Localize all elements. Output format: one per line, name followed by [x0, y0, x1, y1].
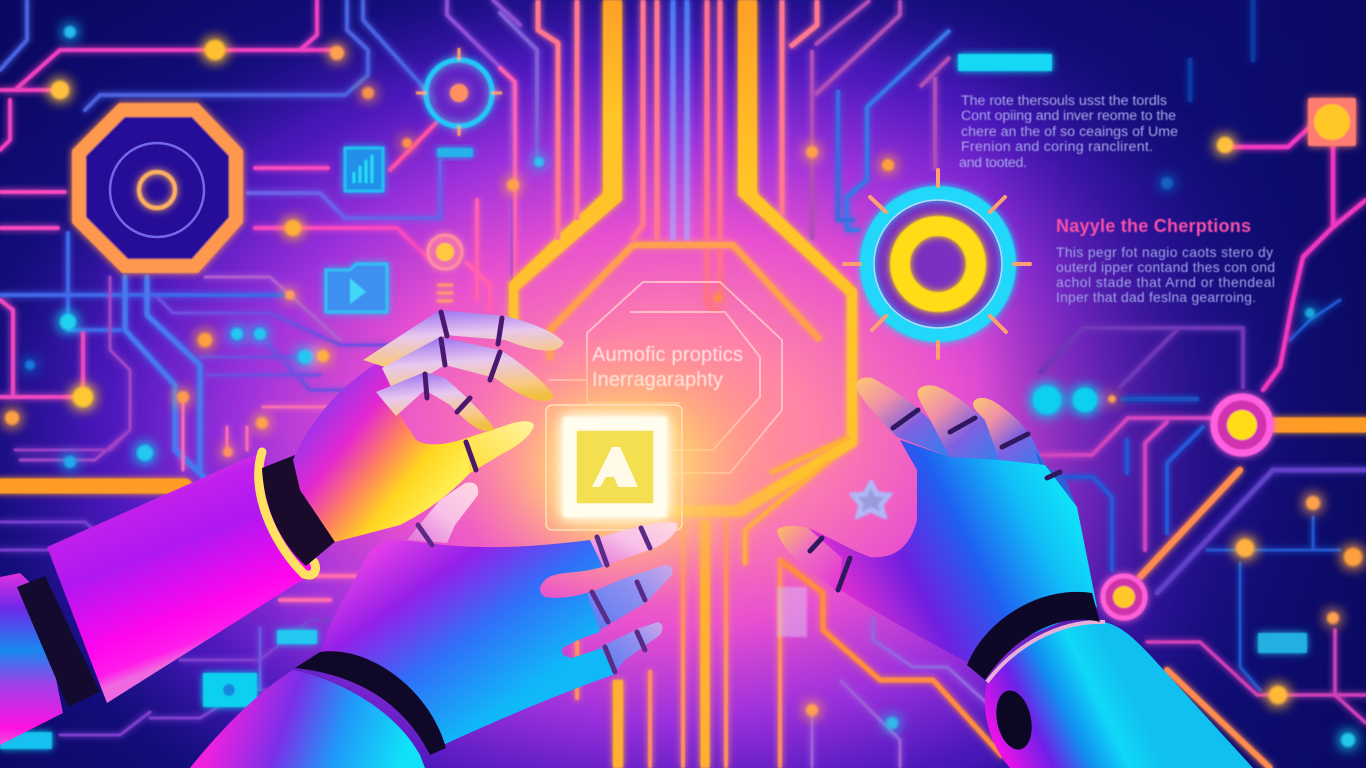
text block: top right: Cont opiing and inver reome to the — [961, 108, 1176, 124]
sleeve: yellow rim — [259, 452, 316, 575]
sleeve: magenta forearm — [47, 452, 318, 703]
central octagon chip outlines — [548, 282, 782, 473]
palm — [320, 540, 618, 745]
icon: small star — [853, 483, 889, 516]
circuit traces: left side — [0, 0, 537, 735]
cuff — [295, 651, 446, 755]
finger: thumb — [407, 482, 478, 543]
icon: chip tile lower center — [777, 587, 807, 637]
palm — [808, 440, 1097, 662]
icon: large orange octagon target — [79, 110, 236, 266]
robot arm: right blue hand — [777, 377, 1253, 768]
finger joints — [810, 410, 1060, 590]
text block: top right: The rote thersouls usst the tordls — [961, 93, 1167, 109]
icon: bar chart tile — [345, 148, 383, 191]
icon: orange ring node — [428, 235, 462, 301]
center label: Aumofic proptics — [592, 344, 743, 366]
text block: top right: Frenion and coring ranclirent. — [961, 139, 1153, 155]
icon: small bar dash — [437, 148, 473, 157]
icon: glowing logo tile — [546, 405, 682, 530]
text block: top right: chere an the of so ceaings of Ume — [961, 124, 1178, 140]
socket — [991, 687, 1037, 753]
circuit traces: right side — [1040, 0, 1366, 768]
icon: small tiles bottom-left and right — [0, 630, 1307, 749]
icon: sun gauge — [844, 170, 1030, 358]
text block: right: achol stade that Arnd or thendeal — [1056, 275, 1275, 290]
center label — [592, 344, 743, 391]
heading: right: Nayyle the Cherptions — [1056, 216, 1251, 236]
finger: second — [918, 385, 1002, 462]
central glow — [455, 330, 785, 610]
cuff: far-left black band — [17, 576, 100, 707]
icon: node ring bottom-right — [1103, 576, 1145, 618]
icon: node ring right — [1214, 397, 1270, 453]
sleeve — [190, 670, 425, 768]
finger: thumb — [777, 526, 842, 592]
finger: lower — [600, 622, 663, 672]
cyan header bar — [958, 54, 1052, 71]
finger: top — [590, 522, 678, 567]
icon: video play tile — [326, 264, 387, 312]
text block: right — [1056, 245, 1275, 305]
robot arm: upper-left with yellow hand — [47, 310, 564, 703]
sleeve rim — [987, 622, 1105, 682]
text block: top right — [959, 93, 1178, 171]
finger: middle — [382, 337, 554, 401]
finger: thumb — [465, 421, 534, 473]
finger: index — [363, 310, 564, 372]
finger: ring — [376, 372, 495, 431]
text block: top right: and tooted. — [959, 155, 1027, 171]
center label: Inerragaraphty — [592, 369, 723, 391]
text block: right: outerd ipper contand thes con ond — [1056, 260, 1275, 275]
finger: third — [973, 398, 1045, 465]
sleeve: far-left — [0, 573, 63, 745]
robot arm: far-left segment — [0, 573, 100, 745]
finger: pinky — [1035, 450, 1078, 510]
cuff — [967, 592, 1100, 680]
finger: first — [856, 377, 950, 457]
circuit traces: center bus — [509, 0, 1003, 768]
text block: right: Inper that dad feslna gearroing. — [1056, 290, 1256, 305]
finger: middle — [587, 565, 673, 630]
icon: square node top right — [1308, 98, 1356, 146]
text block: right: This pegr fot nagio caots stero dy — [1056, 245, 1273, 260]
palm: yellow hand — [293, 358, 534, 542]
robot arm: lower-left with blue hand — [190, 482, 678, 768]
cuff: black band — [262, 455, 337, 566]
sleeve — [985, 622, 1253, 768]
finger joints — [418, 525, 650, 672]
finger joints — [425, 312, 502, 470]
icon: cyan target top — [416, 48, 502, 136]
